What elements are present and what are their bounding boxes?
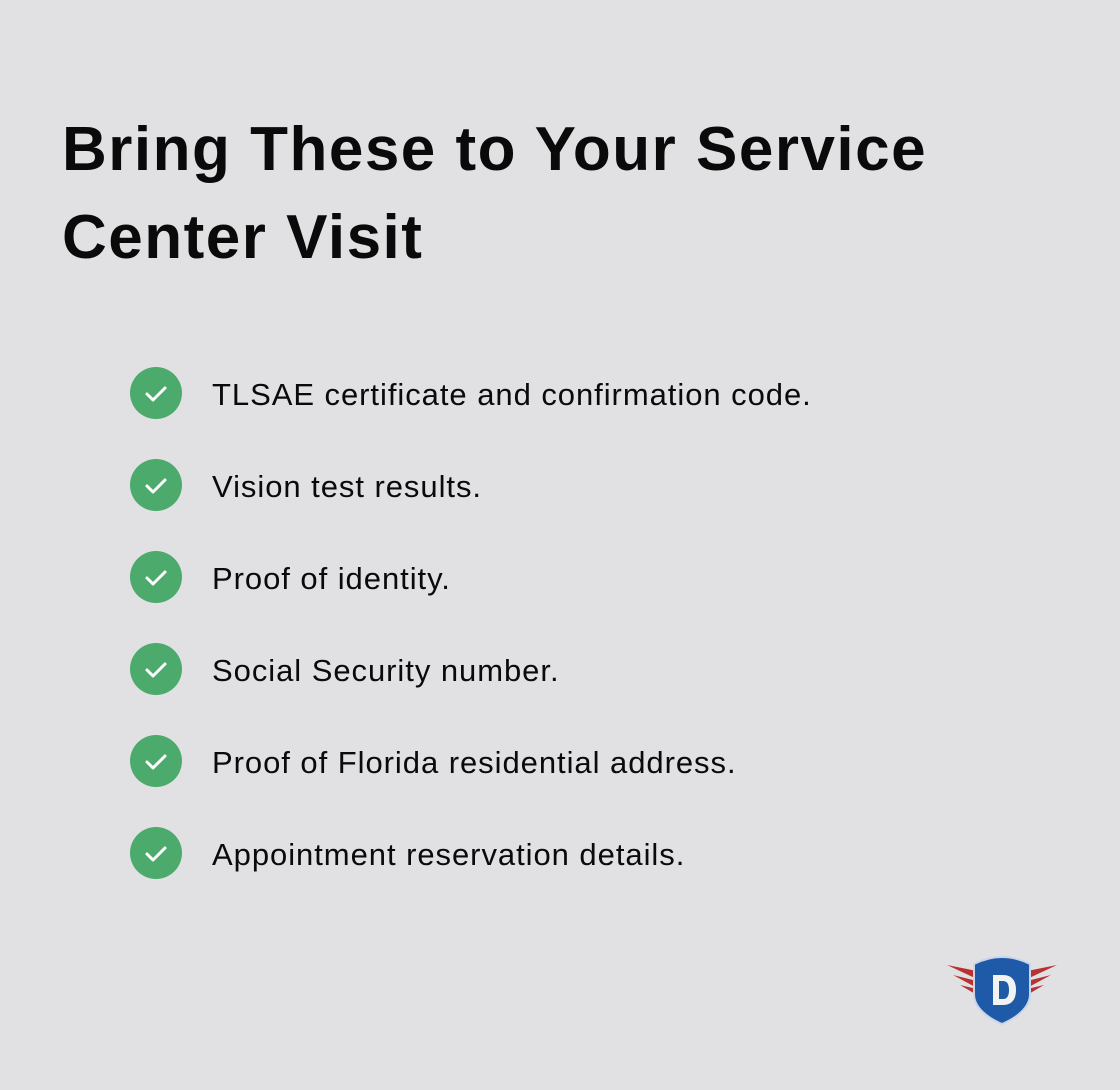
item 4: Social Security number. [212,653,560,688]
item 6 [130,827,685,879]
item 4 [130,643,560,695]
title [62,115,927,272]
item 5: Proof of Florida residential address. [212,745,737,780]
item 3: Proof of identity. [212,561,451,596]
item 2 [130,459,482,511]
item 1: TLSAE certificate and confirmation code. [212,377,812,412]
item 1 [130,367,812,419]
item 6: Appointment reservation details. [212,837,685,872]
item 2: Vision test results. [212,469,482,504]
item 5 [130,735,737,787]
item 3 [130,551,451,603]
title: Center Visit [62,203,423,272]
title: Bring These to Your Service [62,115,927,184]
logo [947,956,1057,1025]
checklist [130,367,812,879]
